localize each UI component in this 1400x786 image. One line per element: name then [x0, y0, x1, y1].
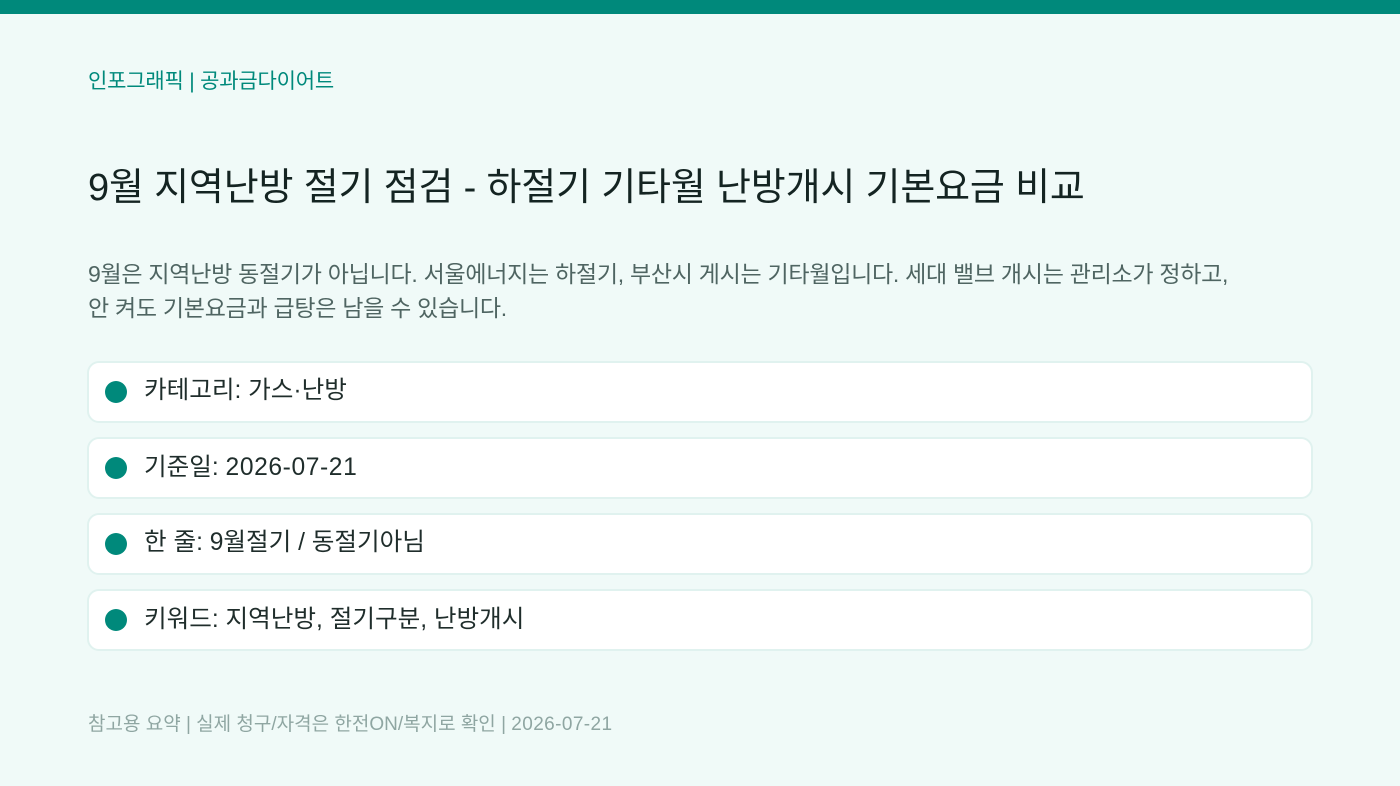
footer note: 참고용 요약 | 실제 청구/자격은 한전ON/복지로 확인 | 2026-07-21	[88, 714, 612, 735]
summary text: 한 줄: 9월절기 / 동절기아님	[144, 529, 425, 556]
card: category	[87, 361, 1313, 423]
eyebrow label: 인포그래픽 | 공과금다이어트	[88, 70, 334, 93]
card: reference date	[87, 437, 1313, 499]
top accent bar	[0, 0, 1400, 14]
intro text: 안 켜도 기본요금과 급탕은 남을 수 있습니다.	[88, 295, 507, 321]
keywords text: 키워드: 지역난방, 절기구분, 난방개시	[144, 606, 524, 633]
icon: summary bullet	[105, 533, 127, 555]
category text: 카테고리: 가스·난방	[144, 377, 347, 404]
intro text	[88, 261, 1228, 321]
date text: 기준일: 2026-07-21	[144, 454, 357, 481]
card: one line summary	[87, 513, 1313, 575]
icon: keywords bullet	[105, 609, 127, 631]
icon: category bullet	[105, 381, 127, 403]
title: 9월 지역난방 절기 점검 - 하절기 기타월 난방개시 기본요금 비교	[88, 167, 1085, 209]
intro text: 9월은 지역난방 동절기가 아닙니다. 서울에너지는 하절기, 부산시 게시는 기타월입니다. 세대 밸브 개시는 관리소가 정하고,	[88, 261, 1228, 287]
card: keywords	[87, 589, 1313, 651]
icon: date bullet	[105, 457, 127, 479]
